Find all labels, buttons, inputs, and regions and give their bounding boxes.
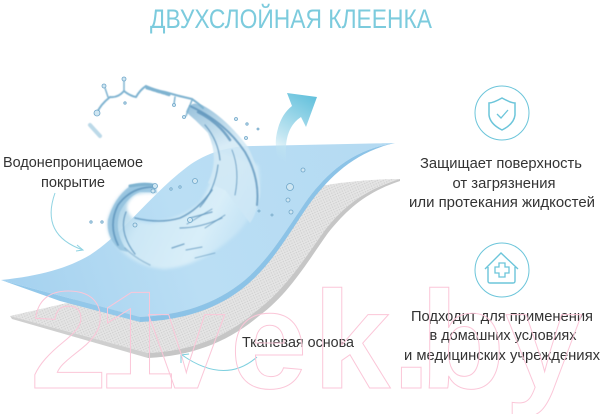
- fabric base layer: [10, 179, 400, 358]
- text: protection: Защищает поверхность: [420, 156, 582, 172]
- text: usage: в домашних условиях: [430, 328, 577, 344]
- text: usage: Подходит для применения: [411, 309, 593, 325]
- title: ДВУХСЛОЙНАЯ КЛЕЕНКА: [150, 3, 432, 34]
- curling wave body: [108, 150, 260, 269]
- rising stream: [186, 104, 260, 223]
- arrow to waterproof coating: [51, 193, 83, 251]
- spray: [90, 80, 203, 186]
- droplets: [90, 77, 305, 227]
- text: protection: от загрязнения: [452, 176, 556, 192]
- arrow to fabric base: [181, 354, 257, 371]
- waterproof blue layer: [1, 143, 395, 322]
- label: fabric base: Тканевая основа: [242, 335, 355, 351]
- text: usage: и медицинских учреждениях: [404, 348, 600, 364]
- text: protection: или протекания жидкостей: [409, 195, 595, 211]
- label: waterproof coating: покрытие: [41, 175, 105, 191]
- water splash: [90, 77, 305, 269]
- wave streaks: [113, 106, 258, 265]
- icon: shield: [475, 86, 529, 140]
- icon: house with cross: [475, 243, 529, 297]
- label: waterproof coating: [3, 155, 143, 191]
- label: waterproof coating: Водонепроницаемое: [3, 155, 143, 171]
- text: usage: [404, 309, 600, 364]
- arrow up: [276, 93, 317, 182]
- watermark: 21vek.by: [30, 263, 582, 414]
- text: protection: [409, 156, 595, 211]
